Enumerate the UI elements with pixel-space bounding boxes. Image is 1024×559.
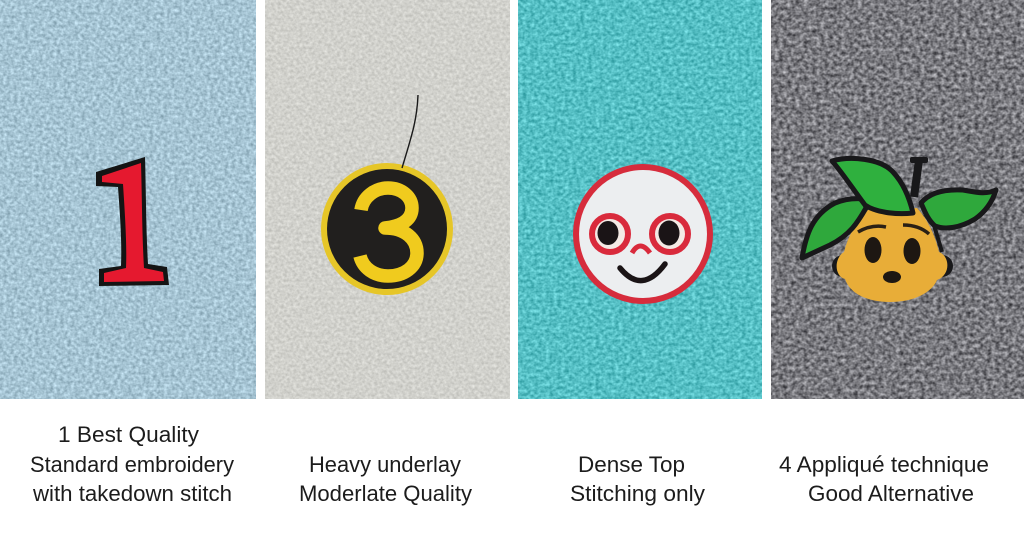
cream towel background — [265, 0, 510, 399]
caption: dense top stitching only — [570, 452, 706, 506]
icon: orange character with green leaves patch — [802, 157, 996, 302]
caption: heavy underlay moderate quality: Heavy underlay — [309, 452, 462, 477]
caption: applique technique good alternative — [779, 452, 989, 506]
caption: dense top stitching only: Dense Top — [578, 452, 685, 477]
caption: best quality standard embroidery: Standard embroidery — [30, 452, 235, 477]
teal towel background — [518, 0, 762, 399]
icon: black and yellow numeral 3 badge — [321, 95, 453, 295]
right leaf — [921, 190, 996, 228]
panel: heavy underlay swatch — [265, 0, 510, 399]
light blue towel background — [0, 0, 256, 399]
caption: best quality standard embroidery: 1 Best Quality — [58, 422, 200, 447]
face — [837, 208, 947, 302]
caption: best quality standard embroidery — [30, 422, 235, 506]
caption: best quality standard embroidery: with takedown stitch — [32, 481, 232, 506]
panel: applique technique swatch — [771, 0, 1024, 399]
ear outlines — [832, 255, 854, 277]
panel: dense top stitching swatch — [518, 0, 762, 399]
icon: red numeral 1 patch — [96, 157, 169, 286]
icon: smiling face patch with red glasses — [573, 164, 713, 304]
caption: heavy underlay moderate quality — [299, 452, 473, 506]
top leaf — [832, 159, 913, 214]
panel: standard embroidery swatch — [0, 0, 256, 399]
stem — [914, 160, 919, 197]
caption: heavy underlay moderate quality: Moderlate Quality — [299, 481, 473, 506]
left leaf — [802, 199, 866, 258]
grey towel background — [771, 0, 1024, 399]
eyes and mouth — [864, 237, 882, 263]
loose black thread — [402, 95, 418, 168]
caption: dense top stitching only: Stitching only — [570, 481, 706, 506]
caption: applique technique good alternative: 4 Appliqué technique — [779, 452, 989, 477]
caption: applique technique good alternative: Good Alternative — [808, 481, 974, 506]
